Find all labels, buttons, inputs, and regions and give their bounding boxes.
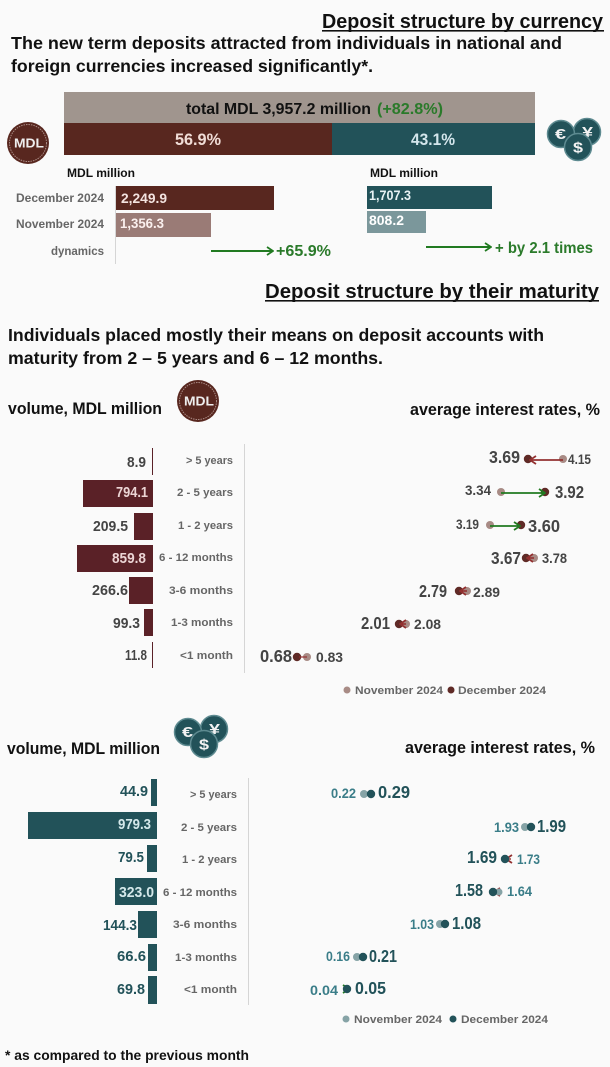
dot plot: MDL interest rates: 3.67 (491, 548, 521, 568)
dot plot: MDL interest rates: 0.83 (316, 650, 343, 665)
chart: MDL deposits by month: dynamics (51, 246, 104, 258)
bar chart: foreign currency volume by maturity: 3-6 months (173, 919, 237, 931)
dot plot: MDL interest rates: 2.79 (419, 581, 447, 601)
dot plot: foreign currency interest rates: 0.21 (369, 946, 397, 966)
bar chart: foreign currency volume by maturity: 6 - 12 months (163, 887, 237, 899)
title: deposit structure by maturity: Deposit structure by their maturity (265, 281, 600, 303)
chart: foreign currency deposits by month: + by 2.1 times (495, 240, 593, 257)
bar chart: MDL volume by maturity: <1 month (180, 650, 233, 662)
dot plot: MDL interest rates: 4.15 (568, 452, 591, 467)
bar chart: foreign currency volume by maturity: 66.6 (117, 949, 146, 965)
chart: MDL deposits by month: December 2024 (16, 193, 105, 205)
dot plot: foreign currency interest rates (310, 782, 566, 998)
heading: volume MDL: volume, MDL million (8, 400, 162, 418)
intro text: maturity (8, 325, 544, 368)
icon: foreign currency coins (548, 118, 600, 160)
chart: MDL deposits by month: 1,356.3 (120, 215, 164, 231)
dot plot: foreign currency interest rates: 1.73 (517, 852, 540, 867)
chart: MDL deposits by month: 2,249.9 (121, 190, 167, 206)
icon: foreign currency coins: ¥ (209, 721, 221, 738)
bar chart: MDL volume by maturity: 2 - 5 years (177, 487, 233, 499)
chart: foreign currency deposits by month: 808.2 (369, 213, 404, 228)
icon: foreign currency coins: ¥ (582, 124, 594, 141)
stacked bar: total and currency shares: total MDL 3,957.2 million (186, 101, 371, 118)
dot plot: foreign currency interest rates: 1.69 (467, 847, 497, 867)
heading: volume foreign currency: volume, MDL million (7, 740, 160, 758)
legend: foreign currency rates: November 2024 (354, 1014, 443, 1026)
icon: MDL coin (177, 380, 219, 422)
bar chart: foreign currency volume by maturity: 69.8 (117, 982, 145, 998)
bar chart: MDL volume by maturity: 99.3 (113, 616, 140, 632)
stacked bar: total and currency shares (64, 92, 535, 155)
intro text: currency (11, 33, 562, 76)
icon: foreign currency coins (174, 716, 228, 758)
bar chart: foreign currency volume by maturity: 2 - 5 years (181, 822, 237, 834)
bar chart: foreign currency volume by maturity: 1-3 months (175, 952, 237, 964)
legend: MDL rates (344, 685, 547, 697)
icon: foreign currency coins: $ (573, 140, 584, 156)
dot plot: foreign currency interest rates: 1.58 (455, 880, 483, 900)
dot plot: MDL interest rates (260, 447, 591, 666)
dot plot: MDL interest rates: 3.19 (456, 517, 479, 532)
bar chart: MDL volume by maturity: 11.8 (125, 648, 147, 664)
stacked bar: total and currency shares: 43.1% (411, 131, 455, 149)
dot plot: MDL interest rates: 2.01 (361, 613, 390, 633)
bar chart: foreign currency volume by maturity: 79.5 (118, 850, 144, 866)
bar chart: MDL volume by maturity: 859.8 (112, 551, 146, 567)
stacked bar: total and currency shares: 56.9% (175, 131, 221, 149)
dot plot: foreign currency interest rates: 0.05 (355, 978, 386, 998)
intro text: maturity: maturity from 2 – 5 years and 6 – 12 months. (8, 348, 383, 368)
dot plot: MDL interest rates: 2.89 (473, 585, 500, 600)
bar chart: MDL volume by maturity: 3-6 months (169, 585, 233, 597)
icon: foreign currency coins: € (555, 126, 567, 143)
dot plot: foreign currency interest rates: 0.04 (310, 983, 339, 998)
dot plot: foreign currency interest rates: 1.64 (507, 884, 532, 899)
chart: foreign currency deposits by month: 1,707.3 (369, 188, 411, 203)
dot plot: MDL interest rates: 3.78 (542, 551, 567, 566)
dot plot: foreign currency interest rates: 1.03 (410, 917, 434, 932)
bar chart: MDL volume by maturity: 209.5 (93, 519, 128, 535)
icon: foreign currency coins: $ (199, 736, 210, 754)
title: deposit structure by currency: Deposit structure by currency (322, 11, 604, 33)
icon: MDL coin: MDL (184, 394, 214, 408)
dot plot: foreign currency interest rates: 1.93 (494, 820, 519, 835)
chart: MDL deposits by month: +65.9% (276, 243, 331, 260)
footnote: * as compared to the previous month (5, 1048, 249, 1063)
intro text: maturity: Individuals placed mostly their means on deposit accounts with (8, 325, 544, 345)
heading: average interest rates MDL: average interest rates, % (410, 401, 600, 419)
dot plot: MDL interest rates: 2.08 (414, 617, 441, 632)
bar chart: foreign currency volume by maturity: 323.0 (119, 885, 154, 901)
chart: foreign currency deposits by month: MDL million (370, 166, 438, 180)
bar chart: MDL volume by maturity: 6 - 12 months (159, 552, 233, 564)
legend: foreign currency rates: December 2024 (461, 1014, 549, 1026)
chart: MDL deposits by month (16, 166, 331, 264)
bar chart: MDL volume by maturity: 1 - 2 years (178, 520, 233, 532)
icon: MDL coin: MDL (14, 136, 44, 150)
dot plot: foreign currency interest rates: 0.16 (326, 949, 350, 964)
bar chart: MDL volume by maturity: 8.9 (127, 455, 146, 471)
legend: MDL rates: December 2024 (458, 685, 547, 697)
bar chart: MDL volume by maturity: 1-3 months (171, 617, 233, 629)
bar chart: foreign currency volume by maturity: <1 month (184, 984, 237, 996)
legend: foreign currency rates (342, 1014, 549, 1026)
legend: MDL rates: November 2024 (355, 685, 444, 697)
bar chart: foreign currency volume by maturity: 44.9 (120, 784, 148, 800)
dot plot: MDL interest rates: 3.69 (489, 447, 520, 467)
dot plot: MDL interest rates: 0.68 (260, 646, 292, 666)
icon: MDL coin (7, 122, 49, 164)
dot plot: foreign currency interest rates: 0.22 (331, 786, 356, 801)
intro text: currency: The new term deposits attracted from individuals in national and (11, 33, 562, 53)
dot plot: foreign currency interest rates: 0.29 (378, 782, 410, 802)
bar chart: foreign currency volume by maturity: > 5 years (190, 789, 237, 801)
chart: foreign currency deposits by month (367, 166, 593, 257)
dot plot: foreign currency interest rates: 1.99 (537, 816, 566, 836)
bar chart: MDL volume by maturity: 266.6 (92, 583, 128, 599)
bar chart: MDL volume by maturity: > 5 years (186, 455, 233, 467)
dot plot: MDL interest rates: 3.34 (465, 483, 491, 498)
dot plot: foreign currency interest rates: 1.08 (452, 913, 481, 933)
bar chart: foreign currency volume by maturity (28, 779, 237, 1004)
bar chart: foreign currency volume by maturity: 979.3 (118, 817, 151, 833)
bar chart: foreign currency volume by maturity: 144.3 (103, 918, 137, 934)
icon: foreign currency coins: € (182, 724, 194, 741)
chart: MDL deposits by month: November 2024 (16, 219, 105, 231)
chart: MDL deposits by month: MDL million (67, 166, 135, 180)
intro text: currency: foreign currencies increased significantly*. (11, 56, 373, 76)
dot plot: MDL interest rates: 3.92 (555, 482, 584, 502)
bar chart: foreign currency volume by maturity: 1 - 2 years (182, 854, 237, 866)
heading: average interest rates foreign currency: average interest rates, % (405, 739, 595, 757)
stacked bar: total and currency shares: (+82.8%) (377, 101, 443, 118)
bar chart: MDL volume by maturity (77, 448, 233, 668)
bar chart: MDL volume by maturity: 794.1 (116, 485, 148, 501)
dot plot: MDL interest rates: 3.60 (528, 516, 560, 536)
